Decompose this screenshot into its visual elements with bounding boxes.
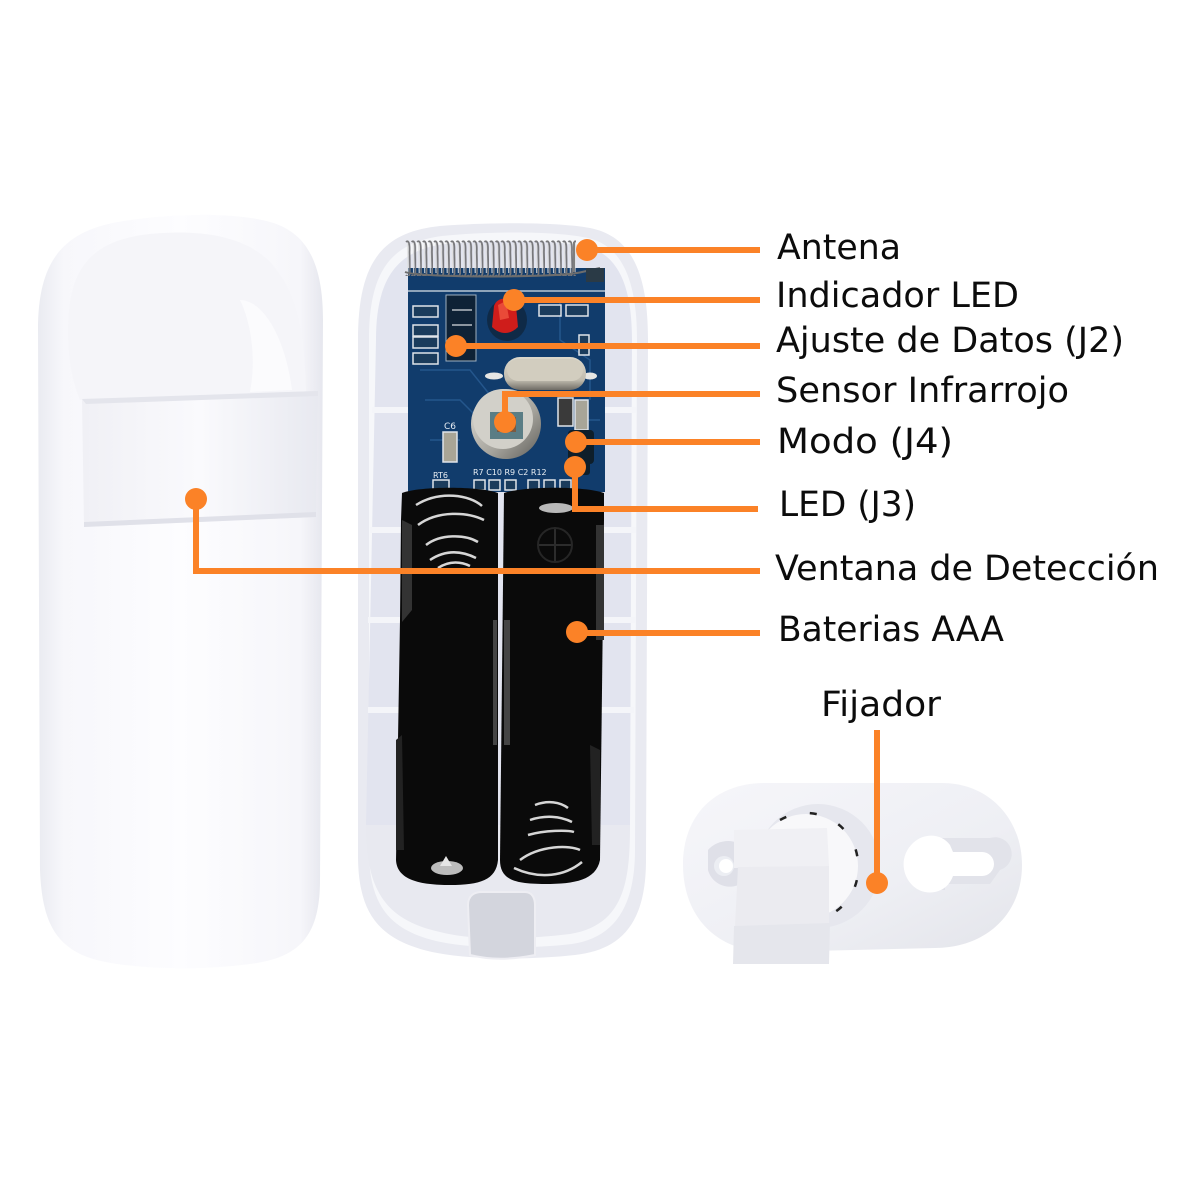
icon: top right contact bbox=[539, 503, 573, 513]
label: Sensor Infrarrojo: Sensor Infrarrojo bbox=[776, 371, 1069, 411]
callout: Ajuste de Datos bbox=[445, 335, 760, 357]
icon: infrared sensor can bbox=[471, 389, 541, 459]
label: Fijador: Fijador bbox=[821, 685, 942, 725]
icon: top left battery spring bbox=[416, 496, 484, 568]
icon: key-hole slot bbox=[930, 837, 1012, 890]
label: Ajuste de Datos: Ajuste de Datos (J2) bbox=[776, 321, 1124, 361]
icon: bottom left contact bbox=[431, 861, 463, 875]
icon: hinge clip bbox=[468, 892, 535, 959]
callout: Sensor Infrarrojo bbox=[494, 391, 760, 433]
label: Antena: Antena bbox=[777, 228, 901, 268]
icon: jumper pads bbox=[413, 305, 589, 490]
icon: bottom right battery spring bbox=[514, 802, 582, 875]
panel: battery holder bbox=[396, 488, 604, 885]
callout: Antena bbox=[576, 239, 760, 261]
callout: Fijador bbox=[866, 730, 888, 894]
icon: spring antenna bbox=[405, 240, 604, 282]
callout: Modo bbox=[565, 431, 760, 453]
callout: Baterias bbox=[566, 621, 760, 643]
panel: open sensor body bbox=[358, 223, 648, 959]
label: Modo: Modo (J4) bbox=[777, 422, 953, 462]
label: Indicador LED: Indicador LED bbox=[776, 276, 1019, 316]
callout: Indicador LED bbox=[503, 289, 760, 311]
callout: LED bbox=[564, 456, 758, 512]
callout lines bbox=[185, 239, 888, 894]
callout: Ventana bbox=[185, 488, 760, 574]
icon: red LED bbox=[487, 298, 527, 341]
panel: front cover of the sensor bbox=[38, 215, 323, 968]
panel: circuit board: RT6 bbox=[433, 471, 448, 480]
icon: swivel joint bbox=[756, 804, 880, 928]
icon: L bracket tab bbox=[734, 828, 829, 868]
panel: circuit board: C6 bbox=[444, 422, 456, 432]
panel: circuit board: R7 C10 R9 C2 R12 bbox=[473, 468, 547, 477]
label: Baterias AAA: Baterias AAA bbox=[778, 610, 1004, 650]
label: LED: LED (J3) bbox=[779, 485, 916, 525]
icon: crystal oscillator bbox=[485, 357, 597, 390]
panel: circuit board bbox=[408, 268, 605, 492]
panel: detection window bbox=[82, 391, 318, 527]
panel: mounting bracket bbox=[683, 783, 1022, 964]
label: Ventana de Detección: Ventana de Detección bbox=[775, 549, 1159, 589]
